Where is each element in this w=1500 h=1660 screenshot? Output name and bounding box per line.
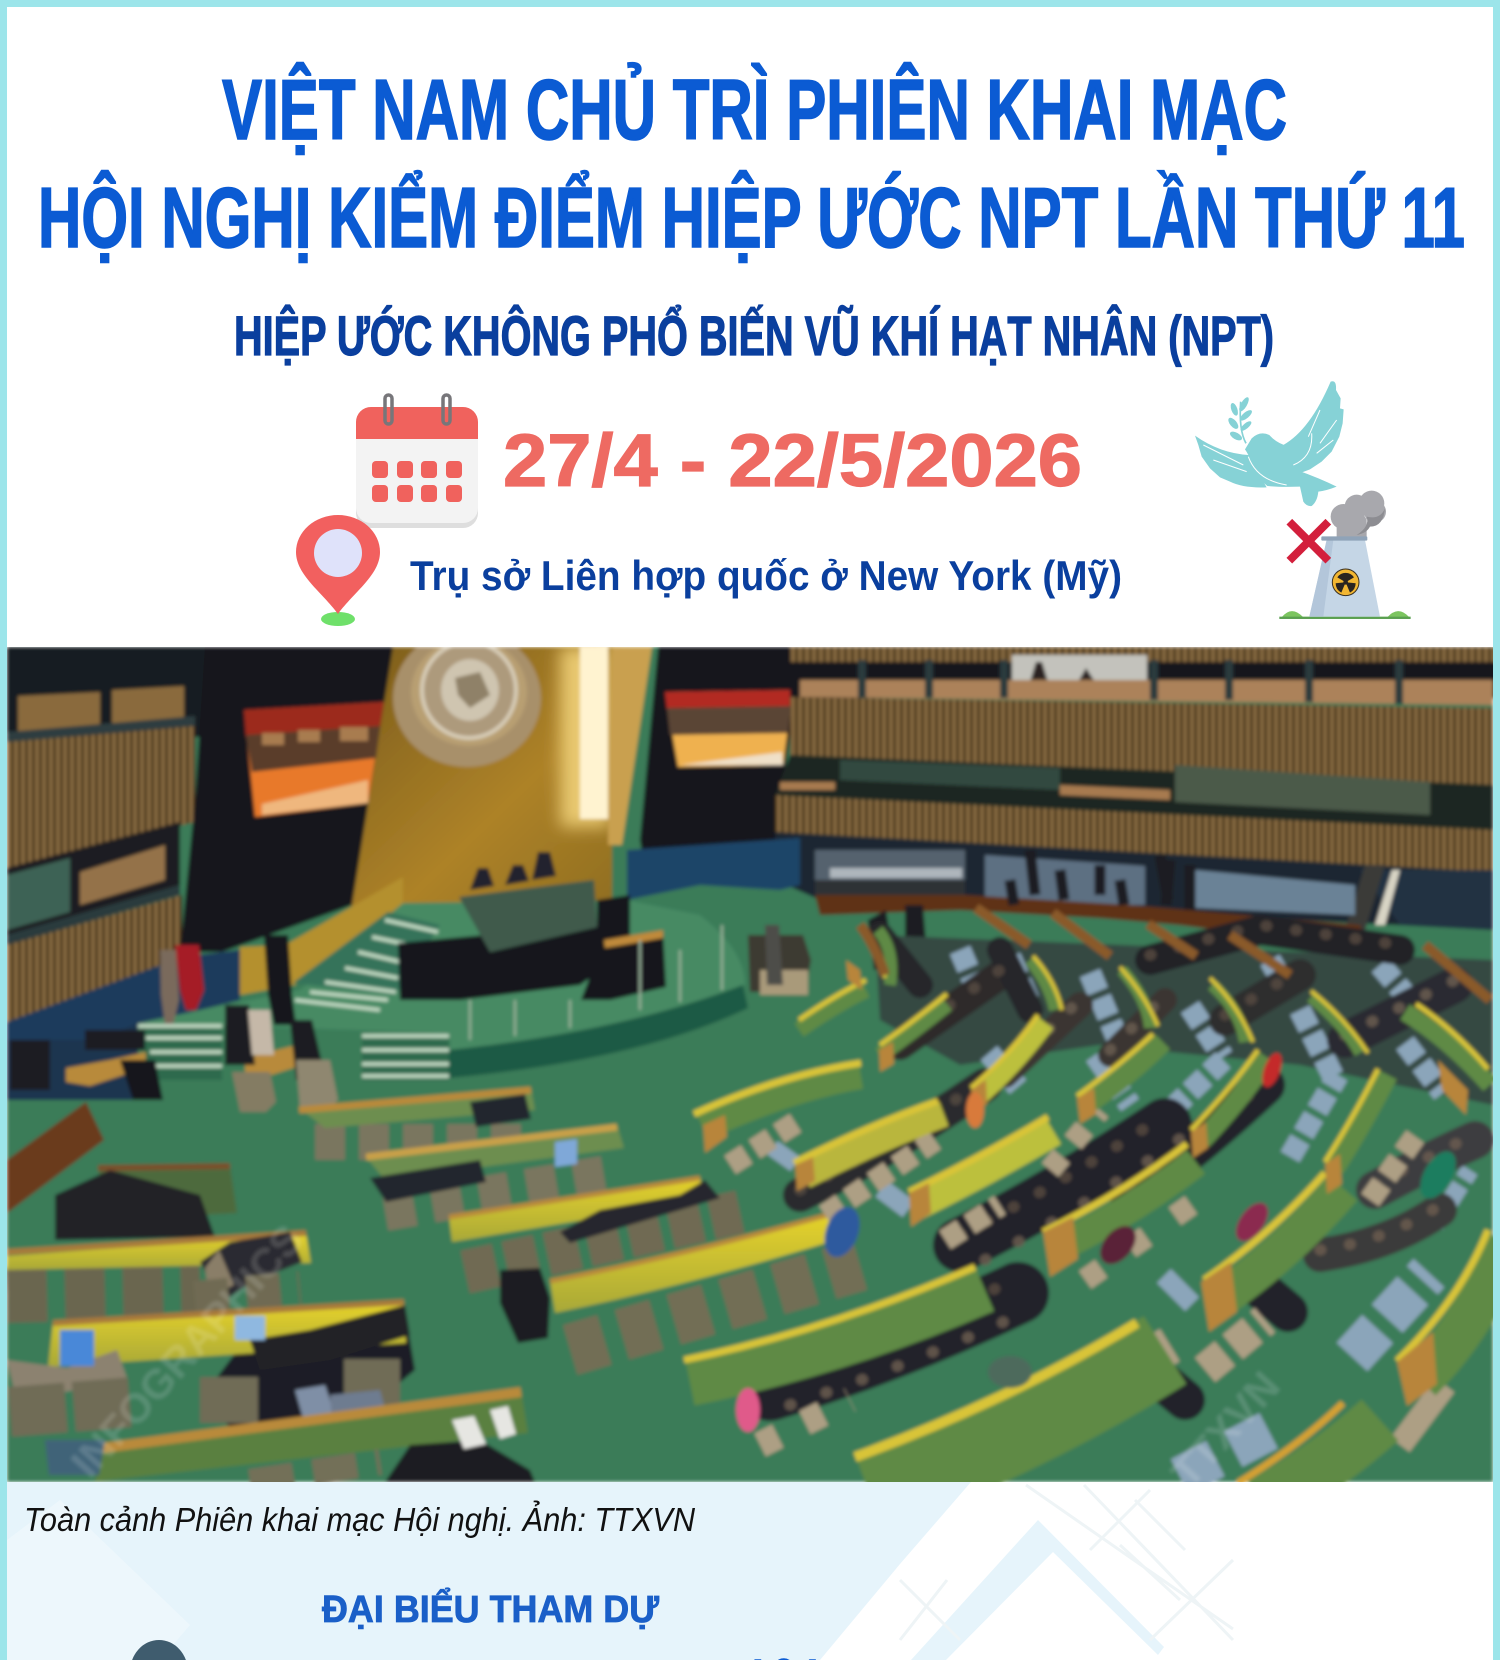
photo: rostrum platform xyxy=(138,852,748,1078)
photo: left wooden rail xyxy=(7,1102,104,1213)
photo: left floor desks xyxy=(7,1088,860,1482)
heading: delegates: ĐẠI BIỂU THAM DỰ xyxy=(322,1586,659,1631)
photo background: green floor xyxy=(7,647,1493,1482)
photo: left wall balconies xyxy=(7,647,240,1100)
icon: calendar xyxy=(356,395,478,528)
photo: lower stairs and side tables xyxy=(10,1005,449,1112)
photo: right balconies xyxy=(627,647,1500,930)
photo: accent clothing xyxy=(736,1050,1463,1432)
photo: right upper dark seating field xyxy=(875,935,1493,1105)
photo: General Assembly hall xyxy=(7,629,1500,1505)
location: Trụ sở Liên hợp quốc ở New York (Mỹ) xyxy=(410,552,1122,599)
photo: woman in red and standing man xyxy=(160,935,296,1025)
photo: gold wall xyxy=(352,647,652,925)
photo: centre-rear tables xyxy=(748,905,927,995)
photo: right seating chairs xyxy=(779,950,1470,1477)
photo: left video screen panel xyxy=(180,647,393,952)
date: 27/4 - 22/5/2026 xyxy=(503,419,1082,502)
photo: watermark: INFOGRAPHICS xyxy=(62,1215,312,1486)
photo: audience faces and clothing mottling xyxy=(770,925,1475,1405)
photo: watermark: TTXVN xyxy=(1162,1362,1289,1496)
background: caption panel xyxy=(7,1482,1233,1660)
photo: right audience bands xyxy=(770,930,1475,1400)
photo: back seating blocks xyxy=(812,848,1362,931)
icon: nuclear cooling tower with cross xyxy=(1279,491,1411,619)
photo caption: Toàn cảnh Phiên khai mạc Hội nghị. Ảnh: TTXVN xyxy=(24,1500,695,1538)
icon: location pin xyxy=(296,515,380,626)
icon: dove with olive branch xyxy=(1195,381,1344,506)
photo: right tan chairs xyxy=(730,1110,1445,1455)
icon: delegate head xyxy=(130,1640,188,1660)
photo: right curved desks xyxy=(684,908,1500,1505)
photo: right video screen panel xyxy=(640,647,802,852)
title xyxy=(38,62,1465,266)
photo: watermark xyxy=(70,1226,1280,1482)
photo: UN emblem xyxy=(393,629,541,767)
